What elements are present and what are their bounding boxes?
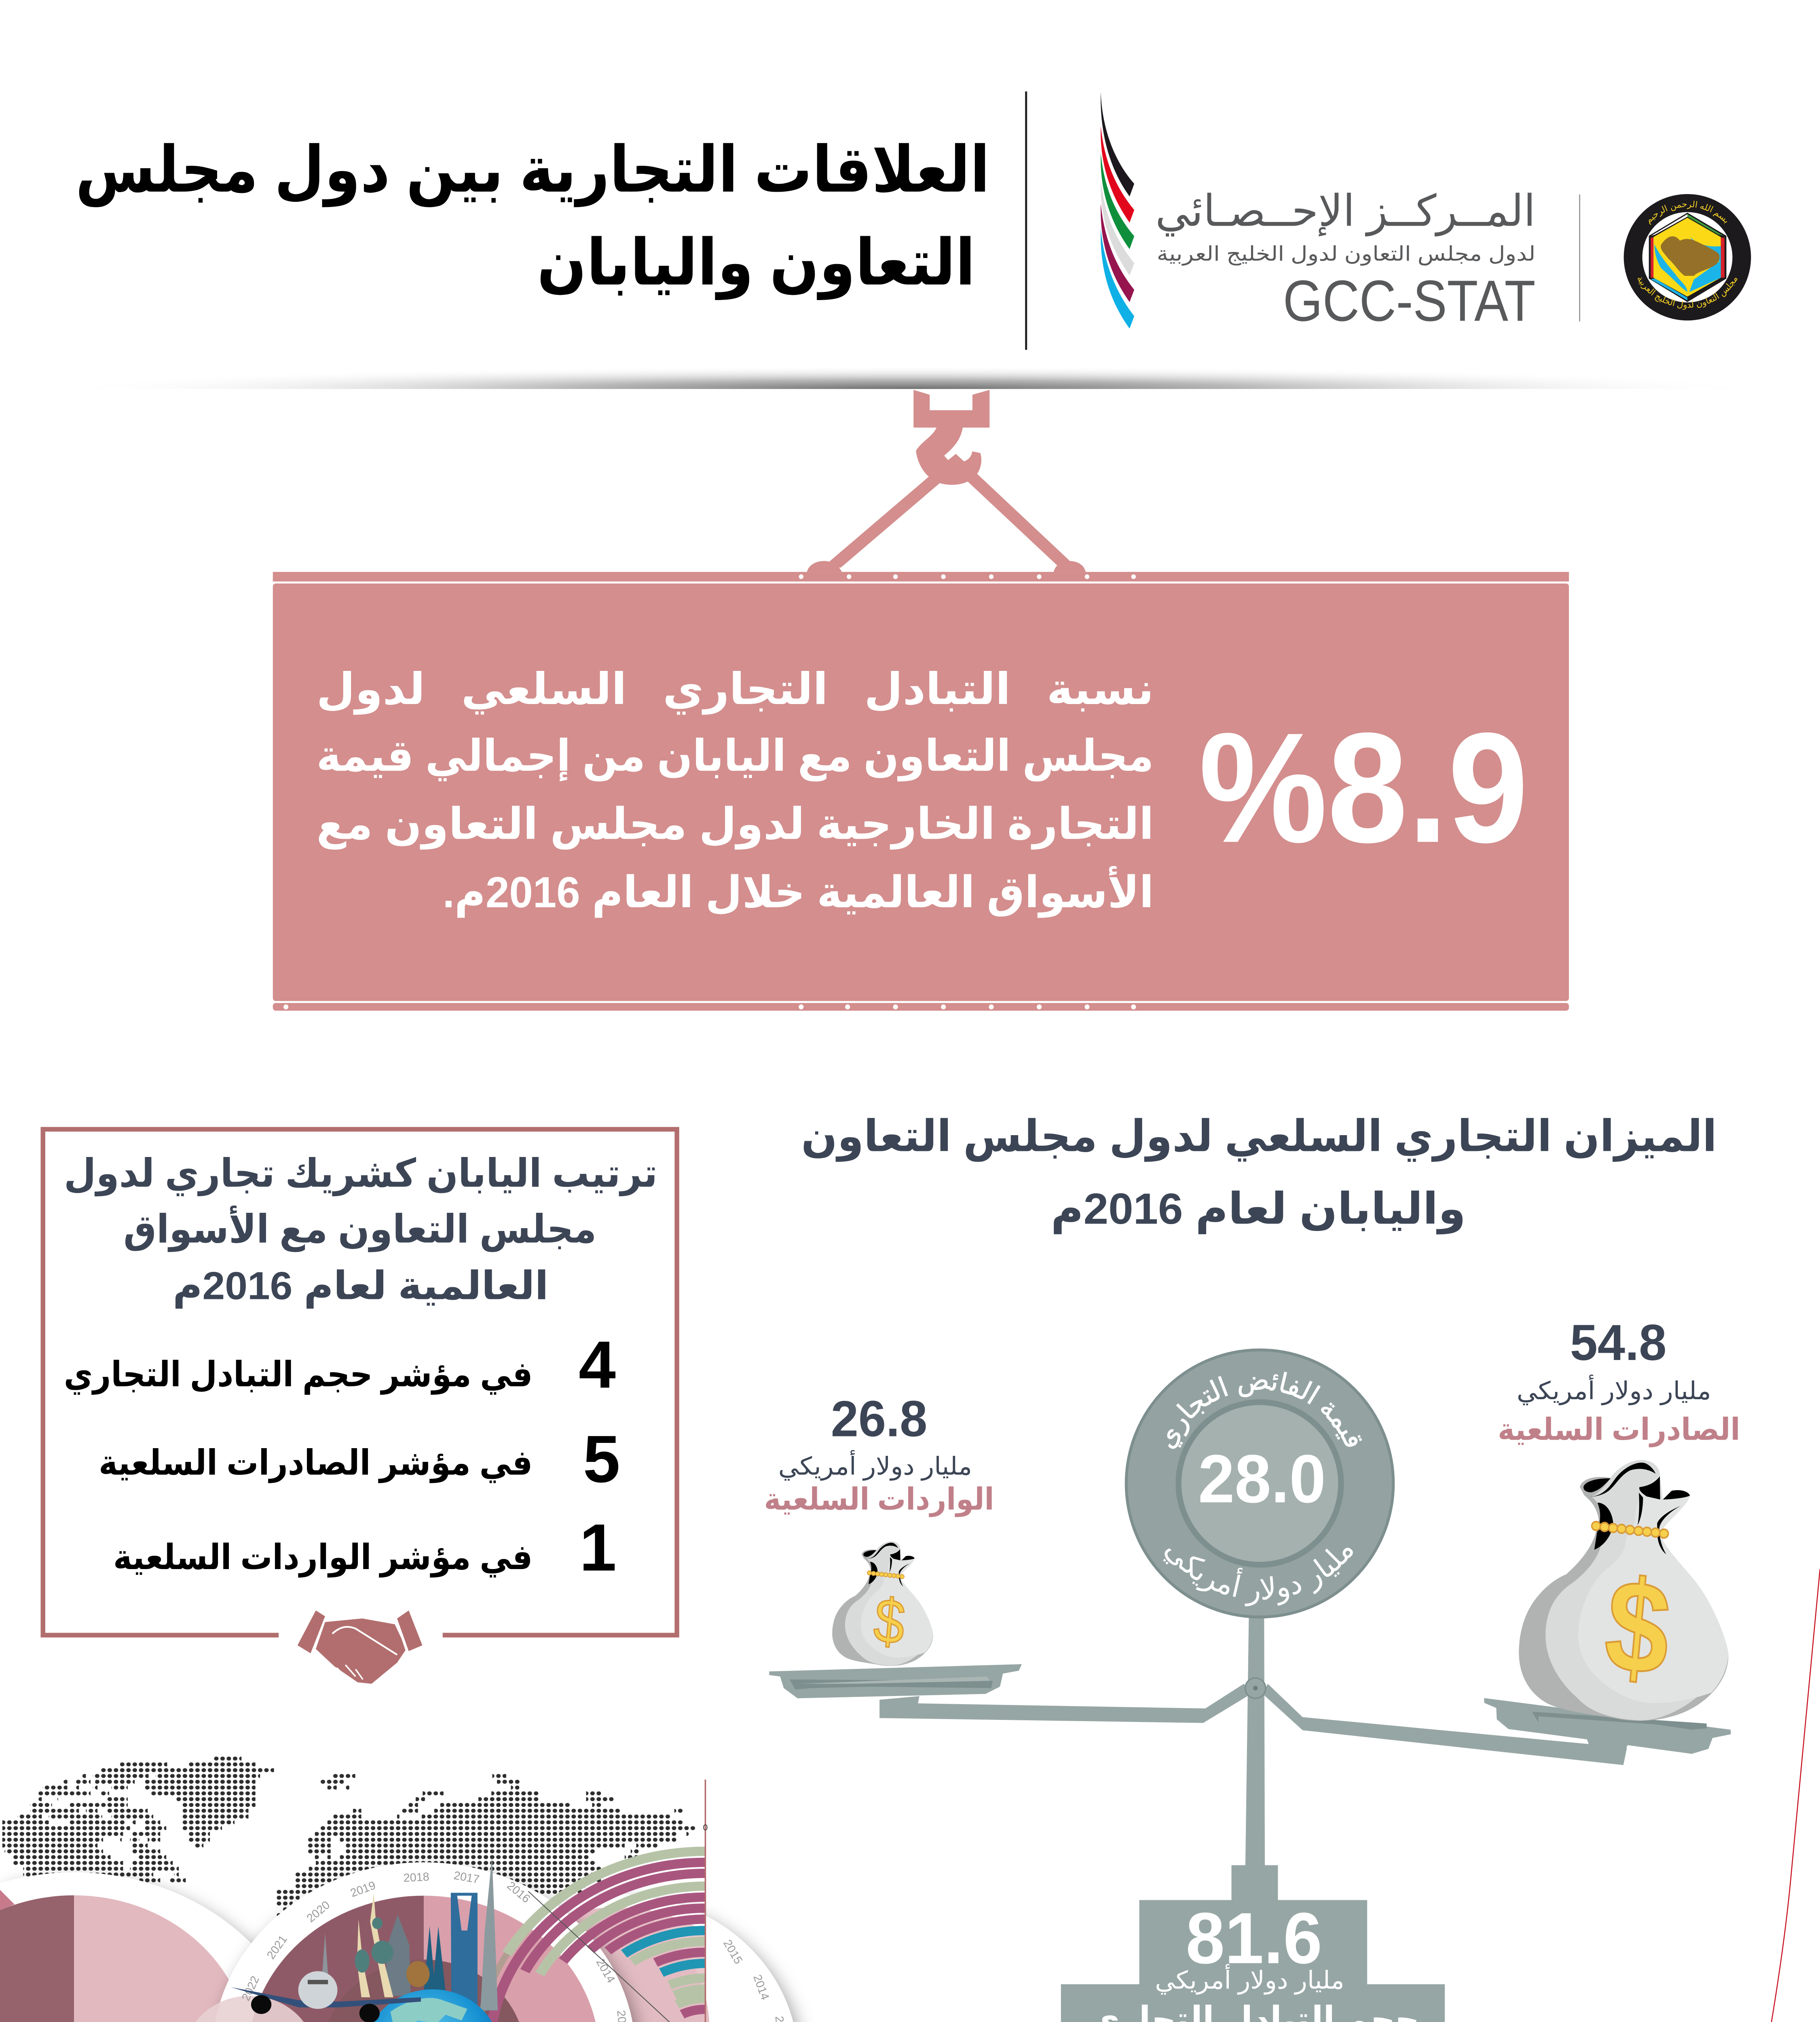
panel text: مجلس التعاون مع اليابان من إجمالي قيمة xyxy=(316,732,1154,782)
scale base: trade volume: مليار دولار أمريكي xyxy=(1155,1964,1344,1995)
panel text xyxy=(316,665,1154,918)
medallion: trade surplus xyxy=(1126,1350,1393,1617)
left ring fill: upper xyxy=(0,1895,229,2022)
ring year labels: 2021 xyxy=(264,1933,290,1962)
ring year labels: 2018 xyxy=(403,1870,429,1885)
stat: exports: الصادرات السلعية xyxy=(1498,1413,1740,1447)
logo: GCC emblem: مجلس التعاون لدول الخليج العربية xyxy=(1635,274,1740,310)
header divider xyxy=(1025,91,1027,350)
title: العلاقات التجارية بين دول مجلس xyxy=(76,134,990,207)
title: التعاون واليابان xyxy=(537,227,975,300)
logo divider xyxy=(1579,195,1580,321)
city skyline xyxy=(355,1857,498,2010)
icon: crane hook xyxy=(807,390,1086,572)
ring year labels: 2016 xyxy=(504,1879,533,1906)
ring year labels: 2022 xyxy=(239,1974,262,2003)
red curves xyxy=(1723,1569,1820,2022)
heading: trade balance: واليابان لعام 2016م xyxy=(1051,1184,1466,1235)
rank row 1 xyxy=(64,1327,616,1402)
rank row 2: 5 xyxy=(583,1422,620,1496)
rivet dots xyxy=(283,574,1136,1009)
medallion: trade surplus: 28.0 xyxy=(1198,1440,1326,1517)
rank row 1: في مؤشر حجم التبادل التجاري xyxy=(64,1355,533,1395)
second lens xyxy=(184,1996,315,2022)
dotted world map xyxy=(2,1756,697,1941)
small money bag xyxy=(832,1542,933,1666)
icon: handshake xyxy=(298,1610,422,1684)
stat: imports: مليار دولار أمريكي xyxy=(778,1450,972,1481)
rank row 1: 4 xyxy=(579,1327,616,1402)
scale beam xyxy=(769,1611,1731,1872)
panel body xyxy=(273,584,1569,1001)
right arm xyxy=(1263,1684,1627,1765)
rank heading: مجلس التعاون مع الأسواق xyxy=(123,1205,596,1252)
panel: Japan rank xyxy=(43,1129,677,1684)
rank row 3 xyxy=(113,1510,617,1585)
ring year labels: 2017 xyxy=(453,1869,480,1886)
logo: GCC-STAT ribbons xyxy=(1101,92,1134,329)
middle ring fill xyxy=(252,1896,596,2022)
ring year labels: 2014 xyxy=(594,1956,617,1985)
stat: exports: 54.8 xyxy=(1570,1314,1666,1371)
panel border xyxy=(43,1129,677,1635)
stat: exports xyxy=(1498,1314,1740,1447)
ring year labels: 2019 xyxy=(349,1879,377,1900)
panel: 8.9 percent share xyxy=(273,572,1569,1011)
left ring corner xyxy=(0,1890,15,1910)
logo: GCC emblem xyxy=(1624,194,1751,320)
ring year labels: 2020 xyxy=(304,1899,332,1925)
globe xyxy=(364,1989,501,2022)
heading: trade balance xyxy=(801,1112,1717,1235)
logo: GCC-STAT wordmark xyxy=(1155,186,1535,333)
rank row 2 xyxy=(99,1422,620,1496)
scale base: trade volume: 81.6 xyxy=(1186,1898,1322,1979)
ring year labels: 2015 xyxy=(721,1937,745,1966)
stat: imports: الواردات السلعية xyxy=(764,1482,994,1517)
right ring xyxy=(435,1894,798,2022)
header shadow xyxy=(228,370,1592,389)
left arm xyxy=(879,1684,1251,1723)
rings bar chart xyxy=(476,1851,705,2022)
panel text: التجارة الخارجية لدول مجلس التعاون مع xyxy=(316,800,1154,850)
heading: trade balance: الميزان التجاري السلعي لدول مجلس التعاون xyxy=(801,1112,1717,1162)
rank heading: ترتيب اليابان كشريك تجاري لدول xyxy=(64,1151,657,1197)
title xyxy=(76,134,990,300)
big money bag: $ xyxy=(1600,1551,1676,1704)
right pan xyxy=(1484,1698,1731,1754)
axes xyxy=(528,1779,951,2022)
scale post xyxy=(1245,1611,1265,1872)
panel top strip xyxy=(273,572,1569,582)
ring year labels: 2014 xyxy=(750,1973,772,2002)
logo: GCC emblem: بسم الله الرحمن الرحيم xyxy=(1643,199,1731,226)
rank heading: العالمية لعام 2016م xyxy=(173,1263,549,1309)
rank row 3: 1 xyxy=(579,1510,617,1585)
rank heading xyxy=(64,1151,657,1309)
logo: GCC-STAT wordmark: لدول مجلس التعاون لدول الخليج العربية xyxy=(1157,242,1535,266)
axis labels: 0 xyxy=(703,1823,708,1832)
small money bag: $ xyxy=(871,1584,908,1658)
logo: GCC-STAT wordmark: المــركــز الإحــصـائي xyxy=(1155,186,1535,237)
panel text: الأسواق العالمية خلال العام 2016م. xyxy=(443,866,1154,918)
airplane xyxy=(231,1933,421,2022)
logo: GCC-STAT wordmark: GCC-STAT xyxy=(1283,269,1535,333)
big money bag xyxy=(1519,1460,1729,1721)
medallion: trade surplus: مليار دولار أمريكي xyxy=(1158,1532,1361,1607)
scale base: trade volume xyxy=(1061,1865,1445,2022)
big number: %8.9 xyxy=(1199,700,1528,876)
left pan inner xyxy=(790,1679,993,1690)
stat: imports: 26.8 xyxy=(831,1390,927,1447)
right ring fill xyxy=(569,1908,709,2022)
rank row 3: في مؤشر الواردات السلعية xyxy=(113,1538,533,1578)
panel text: نسبة التبادل التجاري السلعي لدول xyxy=(316,665,1154,715)
stat: imports xyxy=(764,1390,994,1517)
chart graphic: rings, city and transport xyxy=(0,1756,1820,2022)
middle ring xyxy=(212,1862,636,2022)
panel bottom strip xyxy=(273,1003,1569,1011)
left ring xyxy=(0,1872,314,2022)
ring year labels xyxy=(233,1869,788,2022)
rank row 2: في مؤشر الصادرات السلعية xyxy=(99,1444,533,1483)
medallion: trade surplus: قيمة الفائض التجاري xyxy=(1150,1365,1370,1453)
left pan xyxy=(769,1664,1022,1698)
stat: exports: مليار دولار أمريكي xyxy=(1517,1375,1711,1405)
pivot xyxy=(1245,1678,1266,1698)
